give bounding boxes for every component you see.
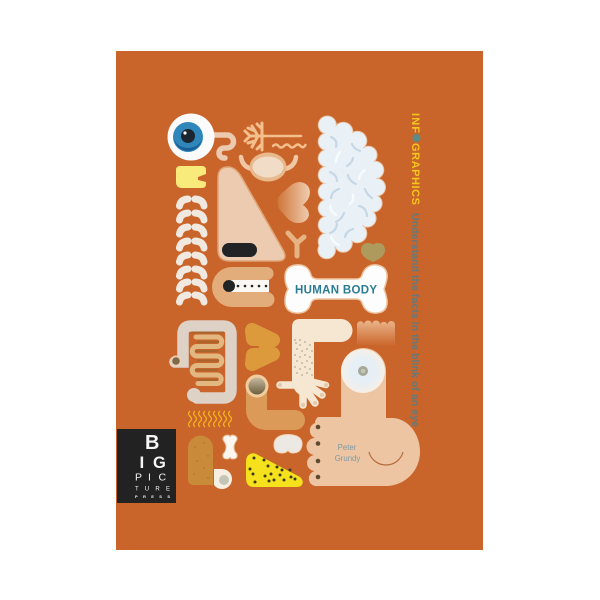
logo: Big Picture Press: I: [140, 453, 144, 472]
logo: Big Picture Press: B: [145, 432, 159, 454]
icon: intestines: [170, 326, 231, 402]
logo: Big Picture Press: [117, 429, 176, 503]
icon: sideways heart: [277, 182, 310, 223]
icon: spine vertebrae: [180, 199, 204, 302]
icon: thumbs-up hand: [306, 348, 420, 486]
icon: stomach block: [357, 320, 395, 345]
logo: Big Picture Press: C: [158, 472, 166, 484]
author name: Peter: [338, 443, 357, 452]
icon: olive heart: [361, 243, 385, 262]
logo: Big Picture Press: P R E S S: [135, 494, 170, 499]
logo: Big Picture Press: P: [135, 472, 142, 484]
icon: nose: [218, 167, 285, 261]
logo: Big Picture Press: T U R E: [135, 486, 170, 492]
icon: elbow pipe: [246, 374, 305, 430]
logo: Big Picture Press: G: [153, 454, 166, 472]
icon: yellow cheese-like fat: [246, 453, 303, 487]
panel: orange cover: [116, 51, 483, 550]
icon: arm and hand: [278, 319, 352, 407]
series name: Infographics: GRAPHICS: [409, 143, 421, 205]
icon: neuron: [245, 123, 306, 150]
icon: y-shaped bone: [288, 233, 304, 256]
logo: Big Picture Press: I: [148, 472, 151, 484]
icon: small bone: [223, 435, 237, 459]
icon: thyroid glands: [252, 330, 273, 364]
series name: Infographics: [409, 113, 421, 205]
icon: mouth with teeth: [212, 267, 275, 307]
author name: [335, 443, 360, 463]
icon: uterus: [241, 152, 296, 182]
icon: yellow tooth: [176, 166, 206, 188]
series name: Infographics: INF: [409, 113, 421, 133]
title: bone with book title: HUMAN BODY: [295, 284, 377, 296]
author name: Grundy: [335, 454, 360, 463]
icon: femur: [188, 436, 232, 489]
title: bone with book title: [285, 265, 387, 313]
icon: yellow squiggles: [188, 411, 232, 427]
icon: eye with optic nerve: [168, 114, 234, 160]
icon: brain: [317, 116, 386, 259]
tagline on spine: Understand the facts in the blink of an eye: [409, 213, 421, 427]
icon: white kidney: [274, 434, 302, 453]
